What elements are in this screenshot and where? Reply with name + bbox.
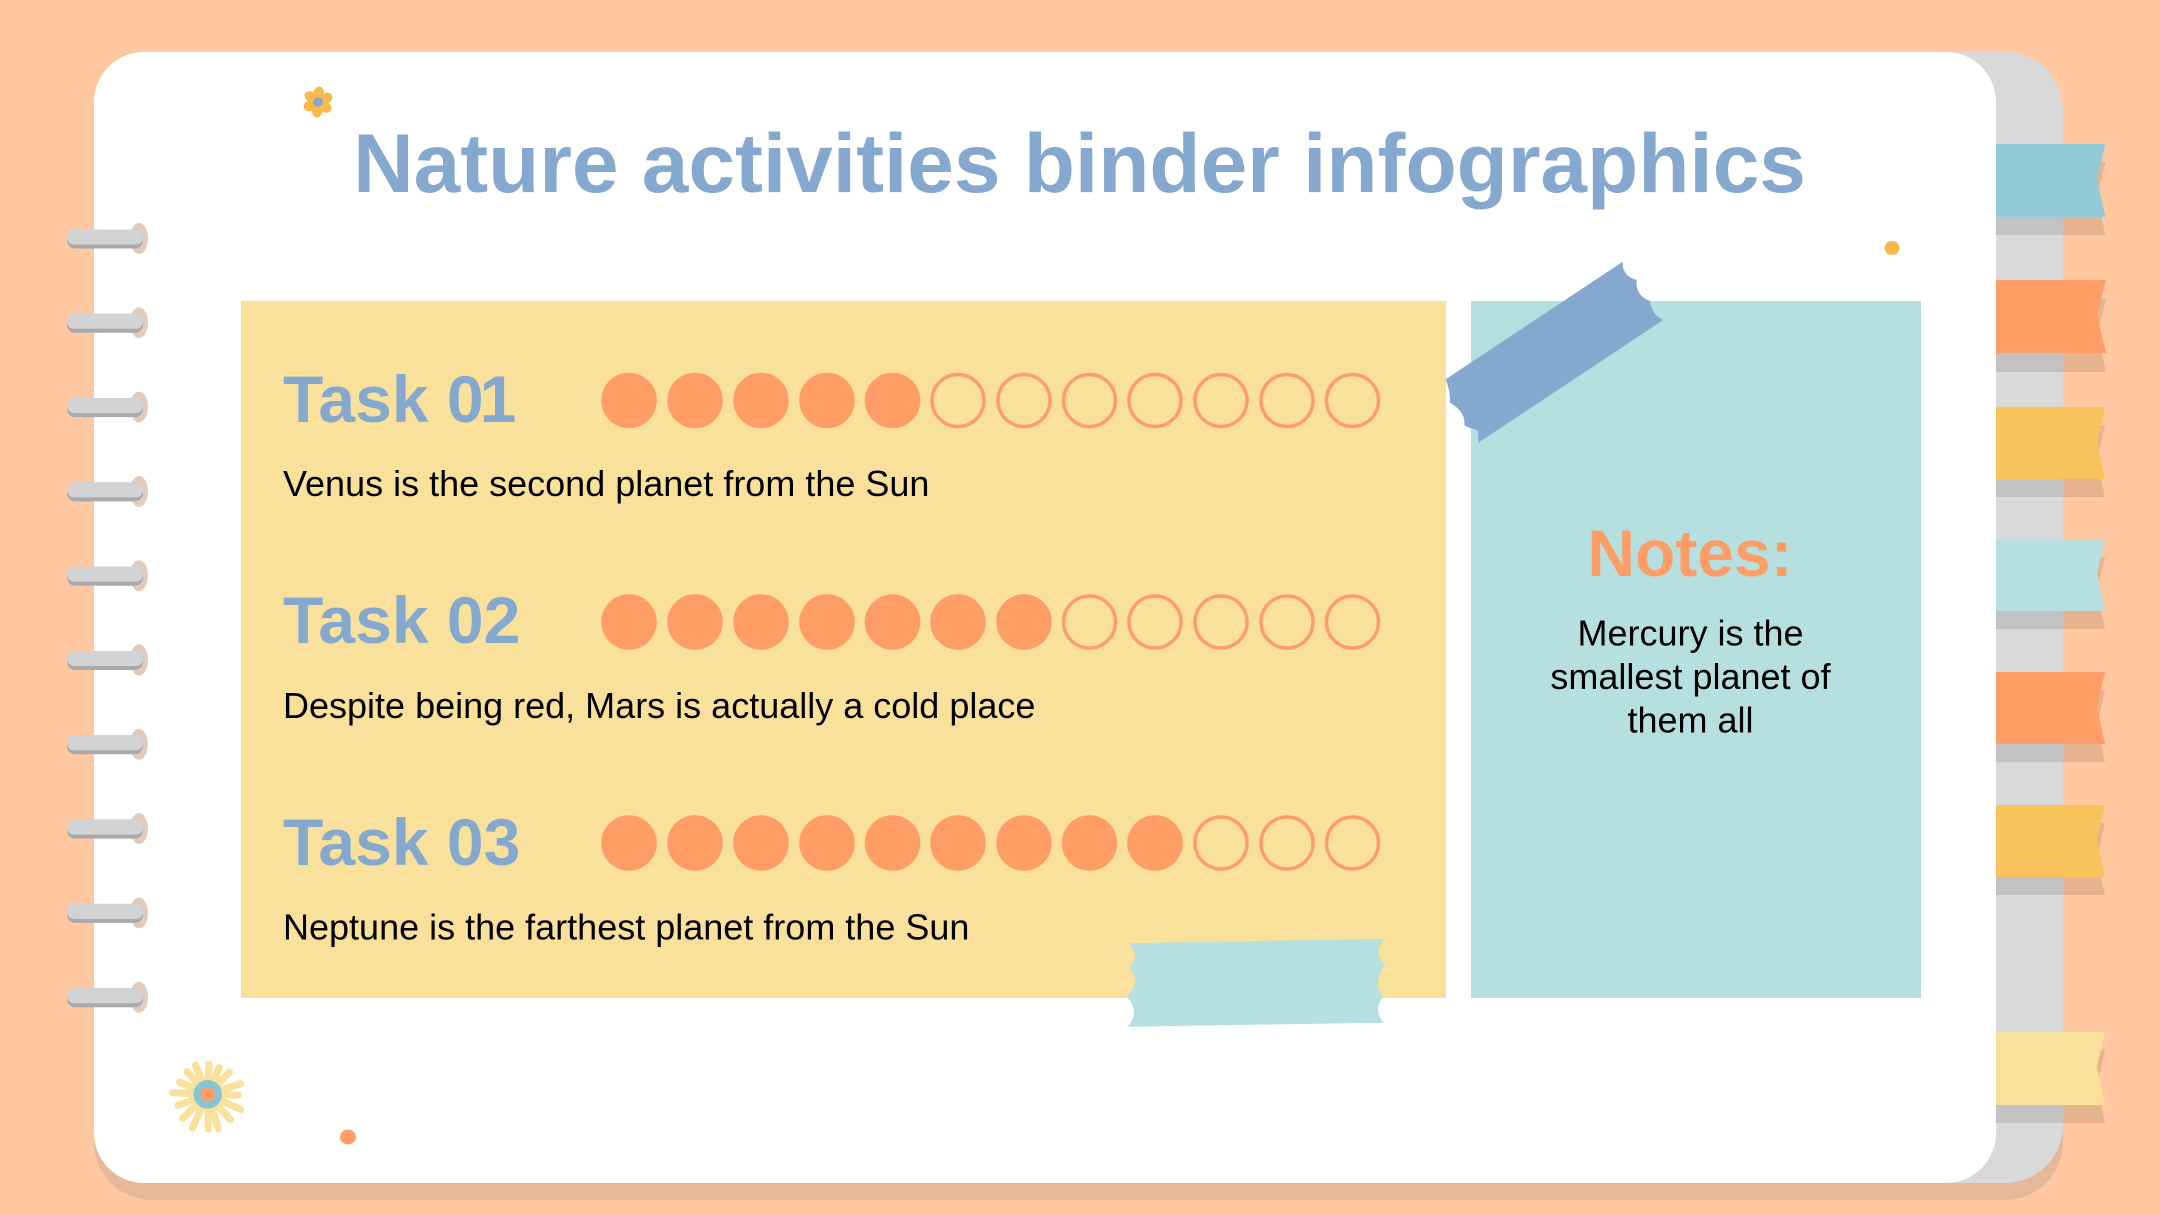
ring 9 xyxy=(67,897,148,928)
decorative dot: gold xyxy=(1884,241,1900,255)
icon: small flower xyxy=(301,85,335,119)
task 03 progress dots xyxy=(603,817,1378,869)
notes heading: Notes: xyxy=(1587,516,1793,590)
washi tape: teal xyxy=(1127,939,1385,1027)
task 03 heading: Task 03 xyxy=(283,805,520,879)
panel: tasks xyxy=(241,301,1446,998)
ring 7 xyxy=(67,729,148,760)
ring 2 xyxy=(67,307,148,338)
task 01 xyxy=(283,362,1378,504)
ring 1 xyxy=(67,223,148,254)
ring 8 xyxy=(67,813,148,844)
ring 10 xyxy=(67,982,148,1013)
tab 5 xyxy=(1996,672,2105,762)
ring 5 xyxy=(67,560,148,591)
task 01 description: Venus is the second planet from the Sun xyxy=(283,463,929,504)
title: Nature activities binder infographics xyxy=(353,116,1806,210)
task 01 heading: Task 01 xyxy=(283,362,516,436)
panel: notes xyxy=(1471,301,1921,998)
tab 1 xyxy=(1996,144,2106,235)
task 02 xyxy=(283,583,1378,726)
notes body: them all xyxy=(1627,700,1754,740)
notes body: Mercury is the xyxy=(1577,612,1804,654)
task 02 heading: Task 02 xyxy=(283,583,520,657)
tab 6 xyxy=(1996,805,2105,895)
tab 3 xyxy=(1996,407,2105,497)
index tabs xyxy=(1996,144,2106,1123)
binder back cover xyxy=(1800,52,2063,1183)
task 01 progress dots xyxy=(603,374,1378,426)
binder rings xyxy=(67,223,148,1013)
ring 4 xyxy=(67,476,148,507)
notes body: smallest planet of xyxy=(1550,656,1832,697)
task 02 description: Despite being red, Mars is actually a cold place xyxy=(283,685,1035,726)
ring 3 xyxy=(67,392,148,423)
ring 6 xyxy=(67,644,148,676)
task 03 description: Neptune is the farthest planet from the Sun xyxy=(283,906,969,948)
tab 7 xyxy=(1996,1032,2105,1123)
icon: sunflower xyxy=(173,1064,241,1129)
tab 4 xyxy=(1996,539,2105,629)
task 02 progress dots xyxy=(603,596,1378,648)
washi tape: blue xyxy=(1446,262,1663,443)
task 03 xyxy=(283,805,1378,948)
tab 2 xyxy=(1996,280,2106,372)
decorative dot: orange xyxy=(340,1130,356,1144)
